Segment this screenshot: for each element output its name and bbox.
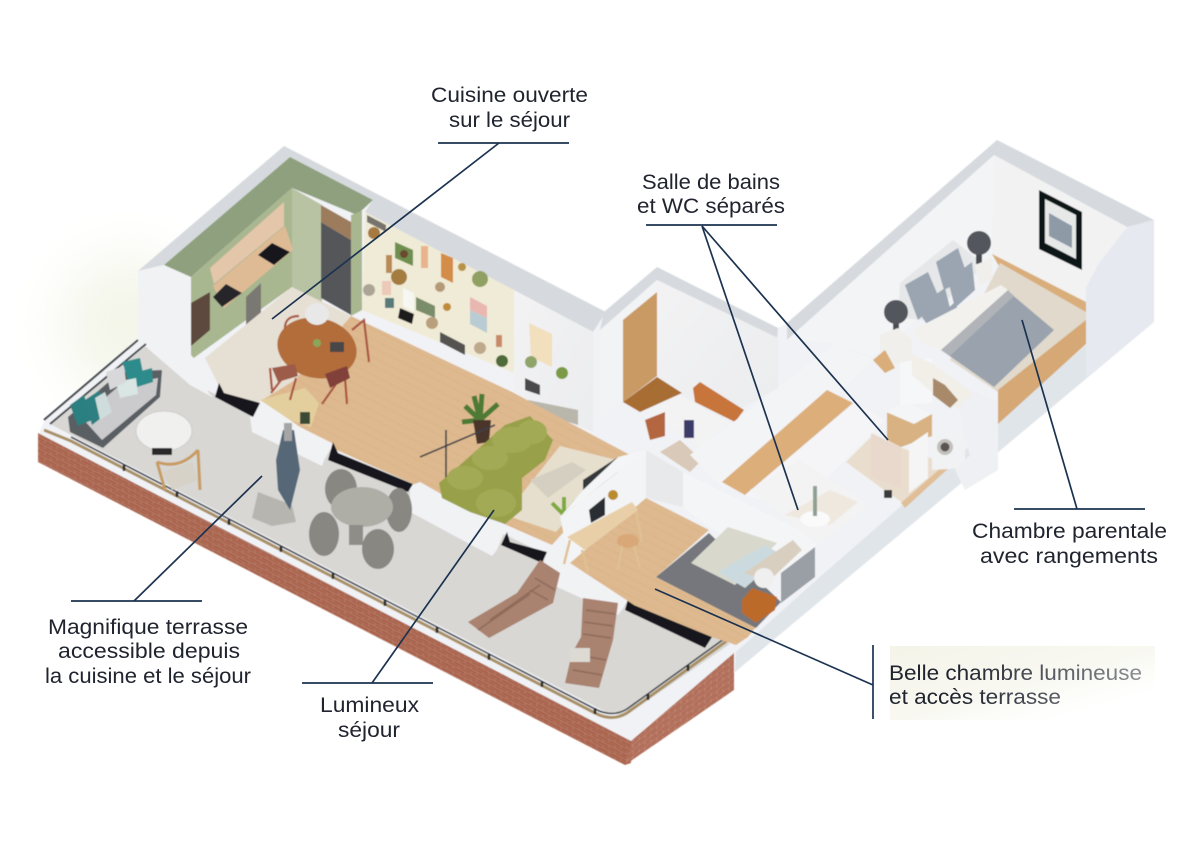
bedroom 2 floor: [570, 498, 756, 645]
callout: belle chambre: [655, 589, 1142, 719]
room with door: [600, 280, 778, 472]
plant and floor lamp in living room: [420, 394, 498, 488]
mirror column: [900, 358, 932, 405]
label: la cuisine et le séjour: [45, 665, 251, 688]
terrace floor: [50, 346, 730, 716]
label: sur le séjour: [449, 109, 570, 132]
headboard: [898, 240, 985, 320]
label: avec rangements: [980, 545, 1158, 568]
callout: chambre parentale: [972, 320, 1167, 568]
wood strip front: [998, 320, 1086, 424]
leader lines: [302, 510, 494, 683]
background glow left: [60, 255, 200, 395]
fridge: [321, 222, 351, 315]
bedroom right wall: [992, 155, 1127, 303]
green column: [351, 211, 362, 316]
leader lines: [646, 225, 888, 510]
rug: [656, 533, 781, 628]
wall caps: [138, 140, 1154, 340]
bedroom 2 walls: [560, 450, 820, 573]
floor plan illustration: [38, 140, 1154, 765]
lamp left: [884, 300, 908, 332]
vanity top: [886, 402, 932, 424]
leader lines: [71, 476, 262, 601]
brick base: [38, 433, 734, 765]
kitchen: [164, 157, 373, 360]
master bedroom: [787, 155, 1127, 490]
worktop: [213, 226, 293, 308]
callout: cuisine: [272, 84, 588, 319]
duvet fold: [941, 290, 1014, 356]
wood strip back: [992, 254, 1086, 316]
desk: [564, 490, 642, 572]
window: kitchen: [215, 383, 260, 417]
living back wall with shelves: [362, 212, 593, 432]
fridge-top shelf: [321, 205, 351, 240]
terrace wall segments: [138, 265, 630, 615]
WC room: [750, 460, 892, 545]
label: Chambre parentale: [972, 520, 1167, 543]
label: Salle de bains: [642, 171, 780, 194]
rattan chair: [157, 450, 200, 490]
outdoor sofa: [68, 358, 162, 448]
leader lines: [272, 143, 569, 319]
duvet: [941, 293, 1054, 387]
pillows: [905, 248, 975, 338]
towel radiator: [909, 432, 928, 493]
sink: [258, 243, 290, 265]
cut wall block: [955, 392, 998, 490]
leader lines: [1014, 320, 1145, 509]
plant on desk side: [552, 497, 576, 515]
hob: [213, 284, 242, 307]
label: Magnifique terrasse: [48, 616, 248, 639]
kitchen right wall: [292, 188, 322, 305]
lamp right: [967, 231, 991, 264]
callout: terrasse: [45, 476, 262, 688]
railing: [44, 340, 728, 718]
background glow behind bedroom caption: [890, 646, 1155, 720]
kitchen left wall: [191, 188, 292, 360]
callout: lumineux séjour: [302, 510, 494, 742]
label: et accès terrasse: [889, 686, 1061, 709]
terrace table set: [309, 469, 412, 569]
label: Cuisine ouverte: [431, 84, 588, 107]
picture frame: [1039, 190, 1082, 270]
window: bedroom: [625, 595, 712, 648]
bed: [691, 527, 802, 588]
building silhouette: [38, 140, 1154, 745]
partition: [871, 433, 901, 488]
laundry bathroom floor: [846, 437, 950, 503]
right outer strip: [735, 290, 1154, 672]
nightstand left: [880, 328, 912, 365]
living floor: [262, 316, 632, 545]
callout: salle de bains: [637, 171, 888, 510]
bedroom left wall: [787, 155, 994, 357]
base of side table: [152, 448, 172, 455]
green sofa: [439, 416, 553, 524]
living rug: [505, 446, 617, 532]
green soffit: [164, 157, 373, 277]
backsplash: [210, 202, 284, 284]
window: living 2: [501, 532, 547, 563]
coffee table: [530, 462, 586, 498]
kitchen floor: [205, 287, 351, 406]
oven column: [191, 292, 210, 346]
bathroom wall shadow: [745, 403, 885, 510]
TV: [583, 457, 618, 497]
storage under bed: [912, 355, 975, 410]
dishwasher: [246, 283, 261, 325]
lounger right: [565, 598, 618, 688]
nightstand and lamp: [742, 568, 777, 623]
vanity cabinet: [887, 412, 932, 447]
washing machine: [932, 430, 965, 470]
corridor floor: [722, 390, 853, 495]
label: séjour: [338, 719, 400, 742]
right outer wall face: [1086, 220, 1154, 378]
lounger left: [468, 560, 560, 638]
label: Lumineux: [320, 694, 420, 717]
leader lines: [655, 589, 873, 719]
marble side table: [136, 411, 192, 451]
wood floor by laundry: [901, 460, 950, 508]
carpet: [950, 263, 1086, 392]
headboard panel: [781, 547, 815, 603]
corridor wall top: [690, 343, 873, 490]
label: et WC séparés: [637, 195, 785, 218]
label: accessible depuis: [58, 640, 240, 663]
sheet: [913, 285, 1012, 350]
window: living 1: [328, 442, 413, 492]
bedside wood: [873, 350, 895, 373]
label: Belle chambre lumineuse: [889, 662, 1142, 685]
parasol: [252, 423, 300, 526]
dining set: [260, 303, 369, 427]
nightstand right: [975, 258, 992, 285]
